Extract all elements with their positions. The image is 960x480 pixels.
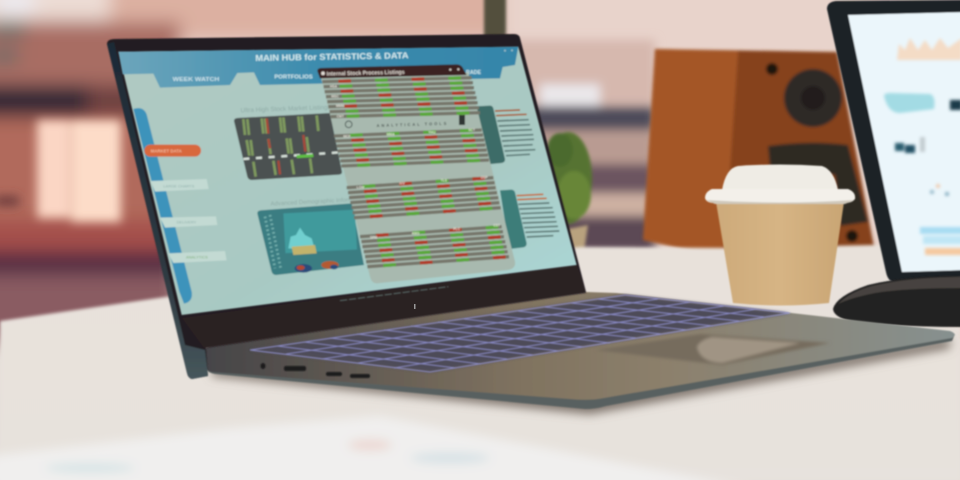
popup red cells <box>322 78 508 262</box>
tab label: trade: RADE <box>466 70 482 76</box>
sidebar pill: orange: MARKET DATA <box>151 148 183 153</box>
popup ticker labels: PLC <box>453 227 461 231</box>
speaker screw holes <box>766 63 858 242</box>
sidebar pill: third <box>160 216 217 228</box>
sidebar pill: fourth <box>168 251 227 263</box>
sidebar pill: orange <box>144 145 201 157</box>
laptop <box>107 34 955 409</box>
popup ticker labels: MMA <box>387 132 395 136</box>
laptop base <box>203 292 955 409</box>
popup ticker labels: IVV <box>399 182 405 186</box>
teal demographic panel <box>257 203 364 275</box>
papers on desk <box>0 416 760 480</box>
screen title: MAIN HUB for STATISTICS & DATA <box>255 50 409 63</box>
popup ticker labels: TLS <box>441 179 448 183</box>
webcam dots and window controls <box>504 49 513 52</box>
popup ticker labels: LOW <box>357 185 365 189</box>
popup title: Internal Stock Process Listings <box>327 70 405 78</box>
sidebar pill: third: DELIVERY <box>177 220 197 225</box>
popup ticker labels: OSP <box>481 176 488 180</box>
lid bottom bezel <box>182 265 586 348</box>
stock listings popup <box>317 64 515 283</box>
popup ticker labels: MCF <box>343 134 351 138</box>
header band with tabs <box>118 47 518 88</box>
popup ticker labels: MMM <box>336 104 345 108</box>
wooden speaker <box>643 49 875 258</box>
lid status light <box>414 304 416 309</box>
popup body <box>321 72 515 283</box>
teal side panel bottom <box>500 190 527 249</box>
backlit keyboard <box>250 295 790 372</box>
sidebar pill: second: LARGE CHARTS <box>163 184 195 189</box>
laptop lid <box>107 34 586 379</box>
blurred office background <box>0 0 960 344</box>
speaker tweeter <box>784 69 842 127</box>
sidebar strip <box>133 108 192 304</box>
tab label: portfolios: PORTFOLIOS <box>274 74 313 80</box>
popup green cells <box>322 78 509 267</box>
popup ticker labels: HSA <box>330 85 338 89</box>
speaker side panel <box>643 49 738 258</box>
desk surface <box>0 243 960 480</box>
popup ticker labels: SCT <box>468 128 475 132</box>
tablet <box>827 0 960 282</box>
analytical tools label: ANALYTICAL TOOLS <box>377 121 448 128</box>
side text block bottom <box>517 194 559 237</box>
speaker woofer <box>768 143 868 226</box>
section heading one: Ultra High Stock Market Listings <box>240 104 331 114</box>
popup title bar <box>317 64 467 78</box>
popup ticker labels: YHU <box>428 130 436 134</box>
popup ticker labels: CST <box>493 224 500 228</box>
touchpad with cup reflection <box>595 334 830 365</box>
popup ticker labels: SPM <box>370 235 377 239</box>
tablet screen content <box>884 38 960 255</box>
cup lid <box>705 164 855 204</box>
laptop ports <box>260 363 370 378</box>
cup body <box>716 202 844 306</box>
background light columns <box>0 120 121 222</box>
tab label: watch: WEEK WATCH <box>173 77 220 83</box>
popup ticker labels: CMT <box>337 114 344 118</box>
screen background <box>118 47 577 315</box>
teal side panel top <box>472 106 505 164</box>
sidebar pill: second <box>151 179 209 192</box>
analytical tools icons <box>345 115 465 128</box>
popup title icon <box>321 71 325 75</box>
side text block top <box>495 110 535 156</box>
computer mouse <box>833 276 960 327</box>
footer text on screen <box>340 287 448 301</box>
popup ticker labels: MSC <box>331 95 339 99</box>
popup window controls <box>449 68 459 71</box>
dark stock grid panel <box>234 113 342 180</box>
laptop shadow on desk <box>212 338 950 414</box>
popup red cells second column <box>326 93 509 267</box>
popup ticker labels <box>330 85 500 239</box>
popup ticker labels: AMG <box>412 231 420 235</box>
popup gray table rows <box>322 78 509 267</box>
background dark post and shelf <box>484 0 506 39</box>
potted plant <box>544 132 592 252</box>
section heading two: Advanced Demographic Information <box>270 197 366 208</box>
sidebar pill: fourth: ANALYTICS <box>186 255 208 260</box>
coffee cup <box>705 164 855 306</box>
laptop screen <box>118 47 577 315</box>
tablet screen <box>848 12 960 272</box>
lid edge <box>107 42 208 379</box>
